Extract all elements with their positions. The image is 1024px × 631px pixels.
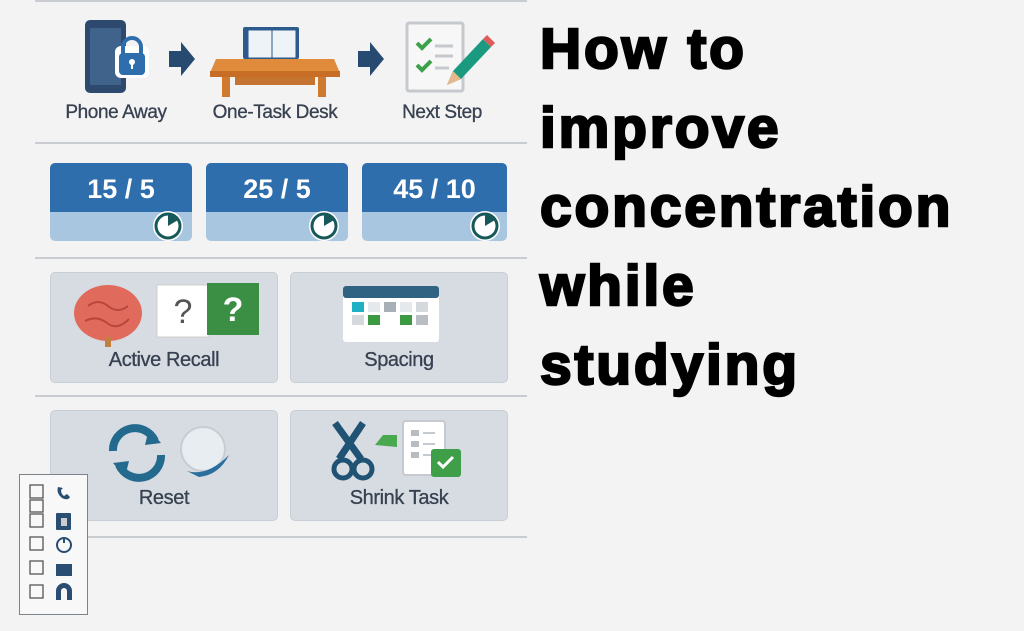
card: Reset: Reset bbox=[139, 487, 189, 509]
card: Reset bbox=[50, 410, 278, 521]
title: studying bbox=[540, 333, 800, 397]
checklist panel bbox=[19, 474, 88, 615]
label: Next Step: Next Step bbox=[402, 102, 482, 123]
title: while bbox=[540, 254, 697, 318]
icon: desk with book bbox=[210, 27, 340, 97]
icon: phone with lock bbox=[85, 20, 149, 93]
timer: 45/10 bbox=[362, 163, 507, 241]
panel: routine steps bbox=[65, 20, 495, 123]
title bbox=[538, 17, 953, 398]
icon: checklist with pencil bbox=[406, 22, 495, 92]
card: Shrink Task: Shrink Task bbox=[350, 487, 448, 509]
arrow bbox=[358, 42, 384, 76]
timer: 15/5 bbox=[50, 163, 192, 241]
card: Active Recall bbox=[50, 272, 278, 383]
title: concentration bbox=[540, 175, 953, 239]
icon: scissors and checklist bbox=[332, 420, 461, 480]
title: How to bbox=[540, 17, 747, 81]
icon: brain and flashcards bbox=[74, 283, 259, 347]
timer: 25/5 bbox=[206, 163, 348, 241]
icon: calendar bbox=[343, 286, 439, 342]
icon: brain and flashcards: ? bbox=[223, 291, 243, 329]
timer: 15/5: 15 / 5 bbox=[87, 174, 155, 204]
label: Phone Away: Phone Away bbox=[65, 102, 167, 123]
arrow bbox=[169, 42, 195, 76]
timer: 45/10: 45 / 10 bbox=[393, 174, 476, 204]
timer: 25/5: 25 / 5 bbox=[243, 174, 311, 204]
title: improve bbox=[540, 96, 781, 160]
card: Spacing bbox=[290, 272, 508, 383]
icon: refresh arrows and globe bbox=[109, 424, 229, 482]
label: One-Task Desk: One-Task Desk bbox=[213, 102, 337, 123]
card: Spacing: Spacing bbox=[364, 349, 434, 371]
icon: brain and flashcards: ? bbox=[174, 293, 192, 331]
card: Active Recall: Active Recall bbox=[109, 349, 219, 371]
card: Shrink Task bbox=[290, 410, 508, 521]
